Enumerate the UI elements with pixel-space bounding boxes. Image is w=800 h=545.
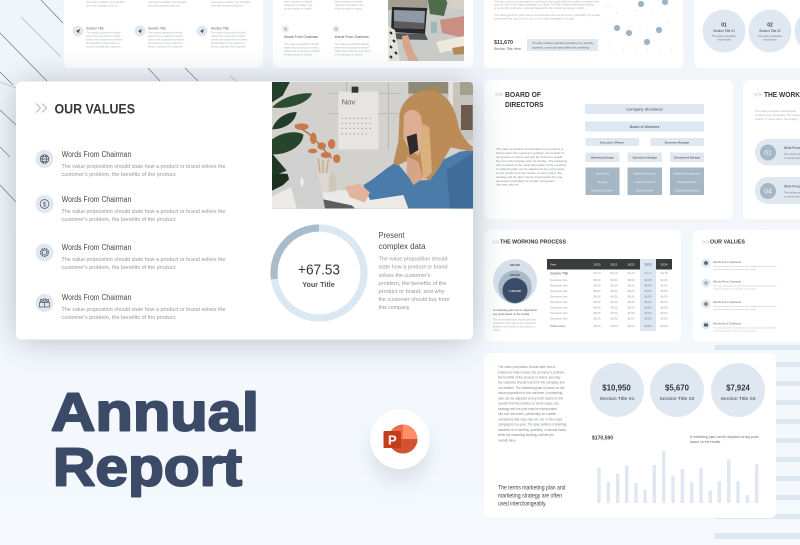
org chart: Marketing Content	[634, 172, 656, 176]
table: $8,000	[593, 291, 601, 293]
panel: board of directors: The value proposition should state how a product or	[496, 147, 563, 151]
table: 2022	[628, 262, 635, 266]
icon: powerpoint badge: P	[388, 432, 397, 447]
panel: our values small: Words From Chairman	[713, 280, 742, 284]
value item 1: The value proposition should state how a product or brand solves the	[62, 164, 226, 170]
panel: bottom financial summary	[484, 353, 776, 518]
panel: top left section titles: Section Title	[148, 26, 166, 30]
panel: board of directors: buy from this company and not another. The marketing	[496, 159, 568, 163]
panel: top middle chairman words: Words From Chairman	[284, 35, 318, 39]
panel: our values small: customer's problem, the benefits of the product.	[713, 288, 757, 290]
panel: top middle chairman words: state how a product or brand	[334, 46, 369, 50]
panel: bottom financial summary: results from the metrics. In some cases, the	[498, 402, 559, 406]
table: $8,000	[644, 326, 652, 328]
panel: top middle chairman words: of the product or brand.	[334, 6, 363, 10]
panel: our values small: The value proposition should state how a product or brand solves the	[713, 326, 777, 330]
heading: board of directors: BOARD OF	[505, 90, 541, 99]
table: 2023	[645, 262, 652, 266]
panel: top middle chairman words: customer's problem, the	[334, 3, 364, 7]
panel: section circles: should state	[763, 38, 777, 42]
value item 1	[36, 150, 226, 178]
value item 4: customer's problem, the benefits of the product.	[62, 315, 177, 321]
table: $4,000	[610, 291, 618, 293]
panel: bottom financial summary: A marketing plan can be adjusted at any point	[690, 435, 759, 439]
table: $3,000	[660, 326, 668, 328]
table: $4,000	[610, 326, 618, 328]
text block: present complex data: the customer should buy from	[378, 297, 450, 303]
text block: present complex data	[378, 231, 450, 311]
org chart: Development Manager	[674, 156, 700, 160]
panel: top left section titles: from this company and not	[211, 4, 243, 8]
panel: top left section titles: state how a product or brand	[211, 34, 246, 38]
bar chart	[597, 451, 758, 503]
table: $3,000	[660, 302, 668, 304]
text block: present complex data: state how a product or brand	[378, 265, 448, 271]
panel: board of directors: the product or brand, and why the customer should	[496, 155, 563, 159]
org chart: Business Manager	[665, 140, 689, 144]
panel: the working process cards: The value proposition should state	[755, 109, 796, 113]
panel: working process table	[484, 230, 681, 341]
panel: the working process cards: 04	[764, 188, 772, 196]
table: $8,000	[593, 302, 601, 304]
panel: top middle chairman words: The value proposition should	[334, 42, 369, 46]
panel: bottom financial summary: into one document, particularly for smaller	[498, 412, 556, 416]
panel: top left section titles: The value proposition should	[211, 30, 246, 34]
panel: our values small: Words From Chairman	[713, 300, 742, 304]
panel: board of directors: strategy and the plan may be incorporated into one	[496, 175, 563, 179]
table: 2020	[594, 262, 601, 266]
table: $4,000	[610, 308, 618, 310]
photo: woman on phone at laptop	[270, 80, 477, 210]
panel: top middle chairman words: of the product or brand.	[284, 6, 312, 10]
org chart: Software Design	[677, 180, 697, 184]
table: Title 02	[610, 272, 618, 275]
table: $6,000	[627, 326, 635, 328]
table: $6,000	[627, 291, 635, 293]
value circles: $10,950	[602, 382, 631, 392]
value circles: Section Title 02	[660, 396, 695, 402]
panel: bottom financial summary: the benefits of the product or brand, and why	[498, 376, 561, 380]
panel: our values small: >>	[702, 240, 710, 246]
panel: top middle chairman words: state how a product or brand	[284, 46, 319, 50]
panel: section circles: should state	[717, 38, 731, 42]
donut chart	[274, 228, 364, 318]
panel: section circles: The value proposition	[712, 35, 737, 38]
org chart: Strategy	[597, 180, 608, 184]
panel: top middle chairman words: customer's problem, the	[284, 3, 313, 7]
table: $6,000	[627, 286, 635, 288]
panel: bottom financial summary: companies that may only run one or two major	[498, 418, 562, 422]
table: Total Income	[550, 324, 566, 328]
table: $8,000	[593, 286, 601, 288]
title: annual report: Annual	[51, 382, 259, 442]
text block: present complex data: Present	[378, 231, 405, 240]
panel: top middle chairman words: The value proposition should	[284, 42, 319, 46]
org chart: Customer Service	[634, 180, 656, 184]
table: $6,000	[627, 302, 635, 304]
table: $8,000	[593, 308, 601, 310]
icon: chevrons	[36, 104, 46, 112]
table: $8,000	[593, 296, 601, 298]
panel: bottom financial summary: campaigns in a year. The plan outlines marketing	[498, 423, 566, 427]
panel: bottom financial summary: $170,590	[592, 436, 613, 442]
panel: top middle chairman words: of the product or brand.	[284, 52, 312, 56]
panel: the working process cards: 01	[764, 150, 772, 157]
table: $3,000	[660, 280, 668, 282]
panel: bottom financial summary: plan can be adjusted at any point based on the	[498, 396, 563, 400]
panel: top left section titles: customer's problem, the benefits	[148, 0, 187, 4]
panel: scatter summary: Section Title Here	[494, 47, 521, 51]
panel: scatter summary: The plan may be incorporated into one document, particularly for smaller companies that	[494, 0, 600, 4]
panel: top middle chairman words: solves the customer's problem,	[284, 49, 321, 53]
text block: present complex data: product or brand, and why	[378, 289, 445, 295]
table: Description Here	[550, 296, 568, 298]
panel: bottom financial summary: overall value.	[498, 438, 517, 442]
org chart	[585, 104, 704, 195]
table: $8,000	[593, 313, 601, 315]
panel: bottom financial summary: based on the results.	[690, 440, 721, 444]
panel: top left section titles: brand, and why the customer	[211, 44, 246, 48]
table: Description Here	[550, 301, 568, 304]
table: Title 01	[593, 272, 601, 275]
panel: our values small: The value proposition should state how a product or brand solves the	[713, 265, 777, 268]
text block: present complex data: solves the customer's	[378, 273, 431, 279]
panel: top middle chairman words: how a product or brand	[284, 0, 312, 4]
panel: top left section titles: the benefits of the product or	[148, 41, 182, 45]
value item 3: customer's problem, the benefits of the product.	[62, 265, 177, 271]
table: Year	[550, 262, 556, 266]
panel: bottom financial summary: value proposition to the customer. A marketing	[498, 391, 562, 395]
value circles: Section Title 01	[600, 396, 635, 402]
panel: our values small: customer's problem, the benefits of the product.	[713, 308, 757, 311]
value item 1: customer's problem, the benefits of the product.	[62, 172, 177, 178]
panel: top middle chairman words: 3	[285, 27, 287, 31]
value item 4: Words From Chairman	[62, 293, 131, 302]
value item 4: The value proposition should state how a product or brand solves the	[62, 307, 226, 313]
scatter chart	[607, 0, 672, 51]
table: Description Here	[550, 318, 568, 320]
panel: bottom financial summary: The value proposition should state how a	[498, 365, 555, 369]
table: $3,000	[660, 318, 668, 320]
panel: board of directors: plan is based on the value proposition to the customer.	[496, 163, 567, 167]
value item 2: customer's problem, the benefits of the product.	[62, 217, 177, 223]
text block: present complex data: problem, the benefits of the	[378, 281, 446, 287]
panel: scatter summary: may run one or two major campaigns in a year. The plan outlines marketing activities	[494, 2, 595, 6]
table: $6,000	[627, 296, 635, 298]
panel: top left section titles: Section Title	[211, 26, 229, 30]
panel: section circles: Section Title 02	[759, 29, 781, 33]
table: 2024	[661, 262, 668, 266]
panel: the working process cards	[743, 80, 800, 219]
panel: top left section titles: brand, and why the customer	[86, 44, 121, 48]
panel: working process table: The value proposition should state how	[493, 318, 537, 322]
org chart: Company Structures	[626, 106, 663, 112]
panel: top left section titles: Section Title	[86, 26, 104, 30]
table: Income Title	[550, 272, 568, 276]
panel: top left section titles: the benefits of the product or	[86, 41, 120, 45]
org chart: Advertising	[596, 172, 610, 176]
panel: top left section titles: customer's problem, the benefits	[86, 0, 125, 4]
panel: working process table: >>	[492, 240, 500, 246]
title: annual report	[51, 382, 259, 498]
panel: section circles: The value proposition	[758, 35, 783, 38]
value circles: $7,924	[726, 382, 750, 392]
table: $6,000	[627, 280, 635, 282]
panel: top left section titles: the benefits of the product or	[211, 41, 245, 45]
value item 3: The value proposition should state how a product or brand solves the	[62, 257, 226, 263]
heading: our values: OUR VALUES	[54, 102, 135, 116]
table: 2021	[611, 262, 618, 266]
text block: present complex data: The value proposition should	[378, 256, 448, 262]
table: Title 04	[644, 272, 652, 275]
heading: the working process: THE WORKING PROCESS	[500, 240, 566, 246]
nested circles chart	[493, 259, 537, 304]
table: $3,000	[660, 291, 668, 293]
value item 1: Words From Chairman	[62, 150, 131, 159]
text block: terms: marketing strategy are often	[498, 492, 562, 500]
table: $3,000	[660, 296, 668, 298]
value item 3: Words From Chairman	[62, 243, 131, 252]
photo: laptop on desk	[388, 0, 464, 61]
panel: section circles	[694, 0, 800, 68]
stripes: right background	[715, 345, 800, 539]
table: $3,000	[660, 308, 668, 310]
table: Description Here	[550, 279, 568, 282]
panel: top middle chairman words: of the product or brand.	[334, 52, 363, 56]
panel: board of directors	[484, 80, 733, 219]
panel: working process table: problem, the benefits of the product or	[493, 326, 535, 328]
panel: top middle chairman words	[273, 0, 473, 68]
panel: our values small: OUR VALUES	[710, 240, 745, 246]
nested circles chart: $80,000	[510, 263, 520, 267]
table: $4,000	[610, 302, 618, 304]
panel: board of directors: DIRECTORS	[505, 100, 544, 109]
value circles: $5,670	[665, 382, 689, 392]
org chart: Board of Directors	[630, 125, 660, 129]
text block: terms	[498, 484, 566, 508]
panel: scatter summary: The plan outlines marketing activities on a monthly,	[532, 41, 594, 45]
panel: working process table: any point based on the results.	[493, 312, 530, 316]
panel: scatter summary: companies that may only run one or two major campaigns in a year.	[494, 16, 575, 20]
org chart: Marketing Manager	[591, 156, 614, 160]
panel: our values small: Words From Chairman	[713, 260, 742, 264]
table: $8,000	[644, 296, 652, 298]
panel: our values small: The value proposition should state how a product or brand solves the	[713, 305, 777, 308]
value item 2: Words From Chairman	[62, 195, 131, 204]
panel: top left section titles: from this company and not	[86, 4, 118, 8]
panel: our values main card	[16, 80, 477, 339]
panel: top left section titles: brand, and why the customer	[148, 44, 183, 48]
panel: working process table: A marketing plan can be adjusted at	[493, 308, 537, 312]
panel: scatter summary: The strategy and the plan may be incorporated into one document, particularly for smaller	[494, 13, 600, 17]
org chart: Executive Officers	[600, 140, 625, 144]
panel: board of directors: >>	[494, 92, 503, 99]
table: $3,000	[660, 286, 668, 288]
table: $4,000	[610, 286, 618, 288]
icon: powerpoint badge	[370, 409, 430, 469]
panel: top middle chairman words: 4	[335, 27, 337, 31]
table: Description Here	[550, 284, 568, 288]
panel: scatter summary: on a monthly, quarterly, or annual basis within the marketing strategy outline.	[494, 6, 585, 10]
org chart: Design & Creative	[592, 188, 614, 192]
panel: working process table: brand.	[493, 329, 500, 332]
table: $8,000	[644, 313, 652, 315]
panel: top middle chairman words: how a product or brand	[334, 0, 363, 4]
panel: top left section titles: solves the customer's problem,	[211, 38, 248, 42]
panel: bottom financial summary: not another. The marketing plan is based on the	[498, 386, 565, 390]
panel: bottom financial summary: activities on a monthly, quarterly, or annual basis,	[498, 428, 566, 432]
value item 3	[36, 243, 226, 271]
panel: board of directors: document, particularly for smaller companies	[496, 179, 555, 183]
table: $8,000	[593, 326, 601, 328]
table: Title 05	[660, 272, 668, 275]
value circles: Section Title 03	[720, 396, 756, 402]
nested circles chart: $30,000	[510, 273, 520, 277]
table: $6,000	[627, 318, 635, 320]
table: $8,000	[644, 302, 652, 304]
table: $8,000	[644, 280, 652, 282]
text block: terms: The terms marketing plan and	[498, 484, 566, 492]
panel: working process table: product of brand solves the customer's	[493, 322, 537, 325]
panel: section circles: Section Title 01	[713, 29, 735, 33]
table: $6,000	[627, 308, 635, 310]
donut chart: +67.53	[298, 262, 340, 278]
panel: top left section titles: customer's problem, the benefits	[211, 0, 250, 4]
panel: scatter summary: quarterly, or annual basis within the marketing.	[532, 46, 590, 50]
table: $8,000	[644, 291, 652, 293]
panel: our values small: Words From Chairman	[713, 322, 742, 326]
org chart: Digital Development	[675, 188, 699, 192]
panel: top left section titles: solves the customer's problem,	[148, 38, 185, 42]
panel: top left section titles	[64, 0, 263, 68]
panel: scatter summary: $11,670	[494, 40, 513, 46]
text block: present complex data: this company.	[378, 305, 411, 311]
nested circles chart: 1,300,000	[509, 289, 521, 293]
panel: board of directors: brand solves the customer's problem, the benefits of	[496, 151, 564, 155]
table: $4,000	[610, 280, 618, 282]
value item 2: $	[43, 202, 47, 208]
org chart: Special Orders	[636, 188, 654, 192]
panel: top left section titles: state how a product or brand	[148, 34, 183, 38]
table: Description Here	[550, 312, 568, 315]
panel: our values small: customer's problem, the benefits of the product.	[713, 330, 757, 332]
panel: the working process cards: >>	[754, 92, 762, 99]
title: annual report: Report	[53, 438, 242, 498]
panel: top left section titles: The value proposition should	[148, 30, 183, 34]
panel: bottom financial summary: the customer should buy from this company and	[498, 381, 565, 385]
panel: our values small	[693, 230, 800, 341]
table: Title 03	[627, 272, 635, 275]
panel: section circles: 02	[767, 22, 773, 28]
panel: top left section titles: The value proposition should	[86, 30, 121, 34]
panel: bottom financial summary: strategy and the plan may be incorporated	[498, 407, 557, 411]
panel: top left section titles: state how a product or brand	[86, 34, 121, 38]
text block: terms: used interchangeably.	[498, 500, 547, 508]
panel: our values small: The value proposition should state how a product or brand solves the	[713, 284, 777, 288]
panel: the working process cards: metrics. In some cases, the strategy	[755, 117, 799, 121]
value item 4	[36, 293, 226, 321]
value item 2	[36, 195, 226, 223]
panel: top middle chairman words: solves the customer's problem,	[334, 49, 372, 53]
value circles	[590, 363, 765, 417]
org chart: Operations Manager	[632, 156, 657, 160]
table: $6,000	[627, 313, 635, 315]
table: $8,000	[593, 280, 601, 282]
text block: present complex data: complex data	[378, 242, 426, 251]
table	[547, 259, 672, 331]
panel: top left section titles: from this company and not	[148, 4, 180, 8]
value item 2: The value proposition should state how a product or brand solves the	[62, 209, 226, 215]
table: $4,000	[610, 313, 618, 315]
panel: top left section titles: solves the customer's problem,	[86, 38, 123, 42]
photo: woman on phone at laptop: Nov	[342, 97, 355, 106]
panel: our values small: customer's problem, the benefits of the product.	[713, 268, 757, 271]
panel: scatter summary	[484, 0, 683, 68]
panel: board of directors: A marketing plan can be adjusted at any point based	[496, 167, 565, 171]
org chart: Website Development	[674, 172, 700, 176]
table: $4,000	[610, 318, 618, 320]
table: Description Here	[550, 306, 568, 310]
panel: bottom financial summary: while the marketing strategy outlines the	[498, 433, 554, 437]
table: $3,000	[660, 313, 668, 315]
table: $8,000	[644, 286, 652, 288]
table: $8,000	[593, 318, 601, 320]
panel: top middle chairman words: Words From Chairman	[334, 35, 369, 39]
table: $8,000	[644, 318, 652, 320]
panel: board of directors: on the results from the metrics. In some cases, the	[496, 171, 562, 175]
panel: bottom financial summary: product or brand solves the customer's problem,	[498, 370, 565, 374]
donut chart: Your Title	[302, 280, 335, 289]
table: Description Here	[550, 290, 568, 293]
panel: board of directors: that may only run.	[496, 182, 520, 186]
table: $8,000	[644, 308, 652, 310]
panel: section circles: 01	[721, 22, 727, 28]
table: $4,000	[610, 296, 618, 298]
